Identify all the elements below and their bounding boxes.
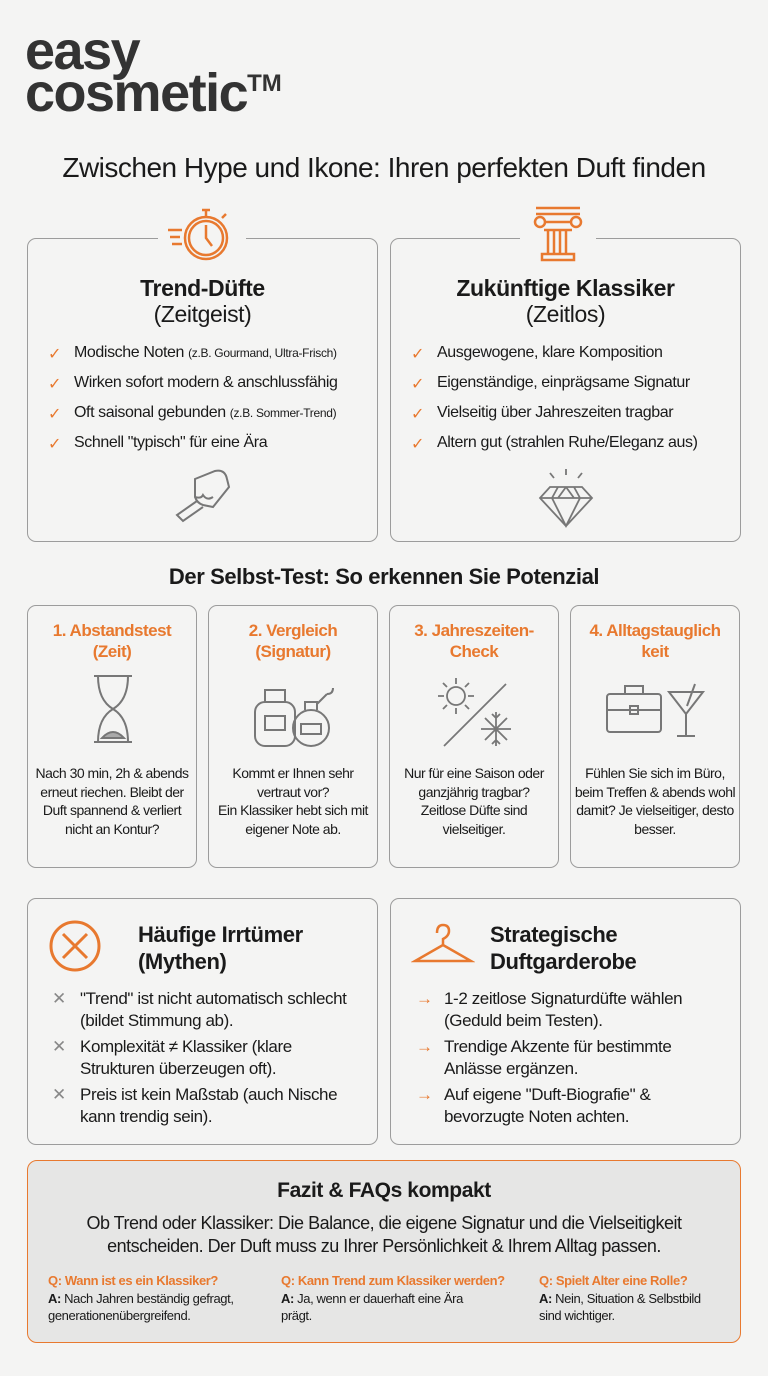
logo	[25, 21, 282, 123]
faq 1: Q: Wann ist es ein Klassiker?	[48, 1273, 218, 1288]
card: vergleich: Ein Klassiker hebt sich mit eigener Note ab.	[218, 802, 368, 836]
list: myths	[52, 989, 347, 1126]
icon: diamond	[538, 469, 594, 528]
faq 2: prägt.	[281, 1308, 312, 1323]
icon: briefcase and glass	[606, 684, 705, 737]
list: trend bullets: Oft saisonal gebunden (z.B. Sommer-Trend)	[74, 404, 336, 421]
heading: duftgarderobe: Duftgarderobe	[490, 949, 636, 974]
list: myths: Komplexität ≠ Klassiker (klare Strukturen überzeugen oft).	[80, 1037, 292, 1078]
list: strategy: 1-2 zeitlose Signaturdüfte wählen (Geduld beim Testen).	[444, 989, 682, 1030]
heading: trend: Trend-Düfte	[140, 275, 265, 301]
card: jahreszeiten: Nur für eine Saison oder ganzjährig tragbar?	[404, 765, 544, 800]
icon: perfume bottles	[254, 688, 334, 747]
panel: klassiker	[390, 238, 741, 542]
icon: x circle	[50, 920, 100, 972]
card: vergleich: 2. Vergleich	[249, 621, 337, 640]
panel: irrtümer: ✕	[52, 989, 66, 1008]
list: trend bullets: Wirken sofort modern & anschlussfähig	[74, 374, 338, 391]
list: myths: "Trend" ist nicht automatisch schlecht (bildet Stimmung ab).	[80, 989, 346, 1030]
list: trend bullets: Schnell "typisch" für eine Ära	[74, 434, 267, 451]
heading: trend	[140, 275, 265, 327]
panel: duftgarderobe: →	[416, 1085, 433, 1104]
icon: stopwatch	[158, 200, 246, 264]
text: fazit summary	[86, 1213, 682, 1256]
card: abstandstest: 1. Abstandstest	[53, 621, 171, 640]
card: alltag: 4. Alltagstauglich	[589, 621, 721, 640]
list: klassiker bullets: Altern gut (strahlen Ruhe/Eleganz aus)	[437, 434, 698, 451]
card: vergleich	[208, 605, 378, 868]
card: abstandstest: Nach 30 min, 2h & abends erneut riechen. Bleibt der Duft spannend & verliert nicht an Kontur?	[36, 765, 188, 836]
list: myths: Preis ist kein Maßstab (auch Nische kann trendig sein).	[80, 1085, 337, 1126]
panel: irrtümer: ✕	[52, 1037, 66, 1056]
heading: selbst-test: Der Selbst-Test: So erkennen Sie Potenzial	[169, 564, 599, 589]
card: jahreszeiten	[389, 605, 559, 868]
list: strategy: Auf eigene "Duft-Biografie" & bevorzugte Noten achten.	[444, 1085, 650, 1126]
panel: trend	[27, 238, 378, 542]
card: abstandstest	[27, 605, 197, 868]
card: vergleich: (Signatur)	[255, 642, 331, 661]
card: alltag: Fühlen Sie sich im Büro, beim Treffen & abends wohl damit? Je vielseitiger, desto besser.	[575, 765, 735, 836]
card: vergleich: Kommt er Ihnen sehr vertraut vor?	[232, 765, 354, 800]
heading: klassiker: Zukünftige Klassiker	[456, 275, 675, 301]
heading: klassiker: (Zeitlos)	[526, 301, 605, 327]
list: trend bullets	[48, 344, 338, 453]
panel: irrtümer	[27, 898, 378, 1145]
panel: trend: ✓	[48, 406, 61, 423]
faq 3: A: Nein, Situation & Selbstbild	[539, 1290, 701, 1306]
icon: hourglass	[94, 675, 132, 743]
heading: irrtümer: Häufige Irrtümer	[138, 922, 303, 947]
faq 3: Q: Spielt Alter eine Rolle?	[539, 1273, 687, 1288]
list: strategy	[416, 989, 682, 1126]
panel: duftgarderobe: →	[416, 1037, 433, 1056]
heading: duftgarderobe	[490, 922, 636, 974]
list: klassiker bullets: Eigenständige, einprägsame Signatur	[437, 374, 690, 391]
faq 2: A: Ja, wenn er dauerhaft eine Ära	[281, 1290, 463, 1306]
panel: trend: ✓	[48, 346, 61, 363]
icon: hanger	[411, 924, 475, 962]
panel: trend: ✓	[48, 436, 61, 453]
panel: irrtümer: ✕	[52, 1085, 66, 1104]
list: strategy: Trendige Akzente für bestimmte Anlässe ergänzen.	[444, 1037, 671, 1078]
list: klassiker bullets: Ausgewogene, klare Komposition	[437, 344, 662, 361]
list: trend bullets: Modische Noten (z.B. Gourmand, Ultra-Frisch)	[74, 344, 337, 361]
faq 1: generationenübergreifend.	[48, 1308, 191, 1323]
faq 2	[281, 1273, 505, 1323]
card: alltag: keit	[641, 642, 669, 661]
panel: trend: ✓	[48, 376, 61, 393]
list: klassiker bullets: Vielseitig über Jahreszeiten tragbar	[437, 404, 673, 421]
logo: easy	[25, 21, 139, 81]
panel: klassiker: ✓	[411, 346, 424, 363]
faq 2: Q: Kann Trend zum Klassiker werden?	[281, 1273, 505, 1288]
panel: duftgarderobe	[390, 898, 741, 1145]
faq 1: A: Nach Jahren beständig gefragt,	[48, 1290, 234, 1306]
text: fazit summary: entscheiden. Der Duft muss zu Ihrer Persönlichkeit & Ihrem Alltag passen.	[107, 1236, 661, 1256]
heading: klassiker	[456, 275, 675, 327]
panel: duftgarderobe: →	[416, 989, 433, 1008]
heading: irrtümer: (Mythen)	[138, 949, 226, 974]
icon: ice cream	[176, 470, 230, 522]
panel: fazit	[27, 1160, 741, 1343]
faq 1	[48, 1273, 234, 1323]
heading: fazit: Fazit & FAQs kompakt	[277, 1179, 491, 1202]
card: jahreszeiten: Check	[450, 642, 498, 661]
panel: klassiker: ✓	[411, 376, 424, 393]
card: jahreszeiten: Zeitlose Düfte sind vielseitiger.	[421, 802, 527, 836]
card: abstandstest: (Zeit)	[93, 642, 131, 661]
text: fazit summary: Ob Trend oder Klassiker: Die Balance, die eigene Signatur und die Vielseitigkeit	[86, 1213, 682, 1233]
logo: cosmeticTM	[25, 63, 282, 123]
heading: trend: (Zeitgeist)	[154, 301, 251, 327]
icon: column	[520, 200, 596, 266]
panel: klassiker: ✓	[411, 406, 424, 423]
card: alltag	[570, 605, 740, 868]
icon: sun and snowflake	[438, 678, 511, 747]
faq 3: sind wichtiger.	[539, 1308, 615, 1323]
faq 3	[539, 1273, 701, 1323]
card: jahreszeiten: 3. Jahreszeiten-	[414, 621, 534, 640]
title: Zwischen Hype und Ikone: Ihren perfekten Duft finden	[62, 152, 706, 183]
panel: klassiker: ✓	[411, 436, 424, 453]
list: klassiker bullets	[411, 344, 698, 453]
heading: irrtümer	[138, 922, 303, 974]
heading: duftgarderobe: Strategische	[490, 922, 617, 947]
